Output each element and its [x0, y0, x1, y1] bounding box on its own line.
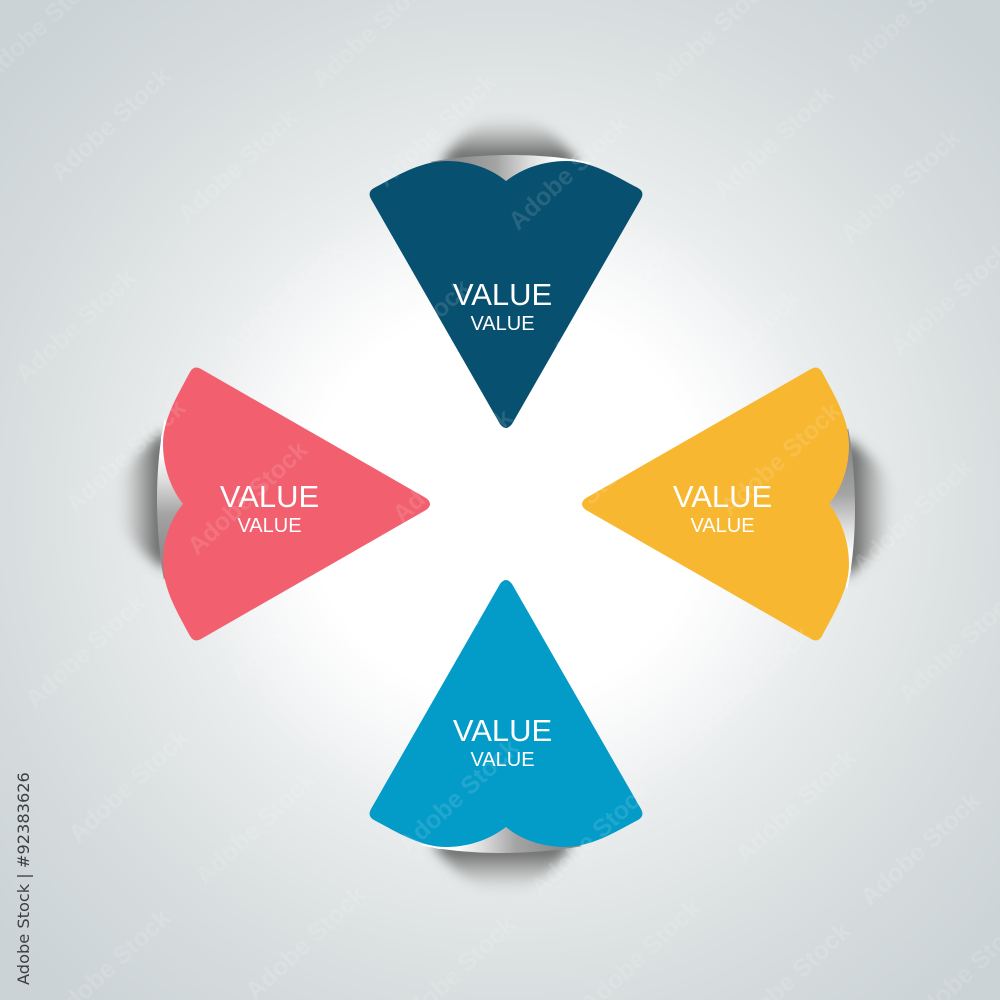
watermarks: Adobe Stock	[685, 621, 816, 745]
petal shape	[370, 161, 642, 428]
watermarks: Adobe Stock	[560, 574, 691, 698]
flap shadow	[118, 430, 168, 570]
curled flap	[827, 428, 855, 590]
watermarks: Adobe Stock	[847, 454, 978, 578]
text: left petal labels: VALUE	[237, 515, 302, 537]
text: right petal labels: VALUE	[690, 515, 755, 537]
text: right petal labels: VALUE	[673, 479, 772, 514]
text: bottom petal labels	[453, 713, 552, 771]
watermarks: Adobe Stock	[353, 607, 484, 731]
panel: top petal	[370, 116, 642, 428]
panel: right petal	[582, 368, 894, 640]
watermarks: Adobe Stock	[547, 241, 678, 365]
watermarks: Adobe Stock	[503, 111, 634, 235]
text: right petal labels	[673, 479, 772, 537]
text: left petal labels	[220, 479, 319, 537]
petal shape	[163, 368, 430, 640]
panel: left petal	[118, 368, 430, 640]
text: bottom petal labels: VALUE	[470, 749, 535, 771]
watermarks: Adobe Stock	[513, 444, 644, 568]
watermarks: Adobe Stock	[182, 436, 313, 560]
curled flap	[430, 155, 592, 183]
watermarks: Adobe Stock	[45, 62, 176, 186]
flap shadow	[432, 842, 572, 892]
watermarks: Adobe Stock	[393, 734, 524, 858]
petal shape	[370, 580, 642, 847]
watermarks: Adobe Stock	[675, 284, 806, 408]
text: left petal labels: VALUE	[220, 479, 319, 514]
watermarks: Adobe Stock	[10, 264, 141, 388]
text: top petal labels: VALUE	[470, 313, 535, 335]
flap shadow	[440, 116, 580, 166]
text: bottom petal labels: VALUE	[453, 713, 552, 748]
watermarks: Adobe Stock	[60, 394, 191, 518]
curled flap	[157, 418, 185, 580]
watermarks: Adobe Stock	[730, 744, 861, 868]
watermarks: Adobe Stock	[172, 104, 303, 228]
watermarks: Adobe Stock	[63, 724, 194, 848]
watermarks: Adobe Stock	[20, 589, 151, 713]
text: top petal labels: VALUE	[453, 277, 552, 312]
watermarks: Adobe Stock	[190, 766, 321, 890]
watermarks: Adobe Stock	[371, 68, 502, 192]
watermarks: Adobe Stock	[387, 404, 518, 528]
flap shadow	[844, 438, 894, 578]
watermarks: Adobe Stock	[835, 124, 966, 248]
petal shape	[582, 368, 849, 640]
watermarks: Adobe Stock	[708, 80, 839, 204]
panel: bottom petal	[370, 580, 642, 892]
watermarks: Adobe Stock	[715, 397, 846, 521]
watermarks: Adobe Stock	[525, 777, 656, 901]
watermarks: Adobe Stock	[225, 564, 356, 688]
text: stock id vertical: Adobe Stock | #92383626	[14, 772, 33, 985]
text: top petal labels	[453, 277, 552, 335]
curled flap	[420, 825, 582, 853]
watermarks: Adobe Stock	[345, 274, 476, 398]
watermarks: Adobe Stock	[855, 787, 986, 911]
watermarks: Adobe Stock	[217, 236, 348, 360]
